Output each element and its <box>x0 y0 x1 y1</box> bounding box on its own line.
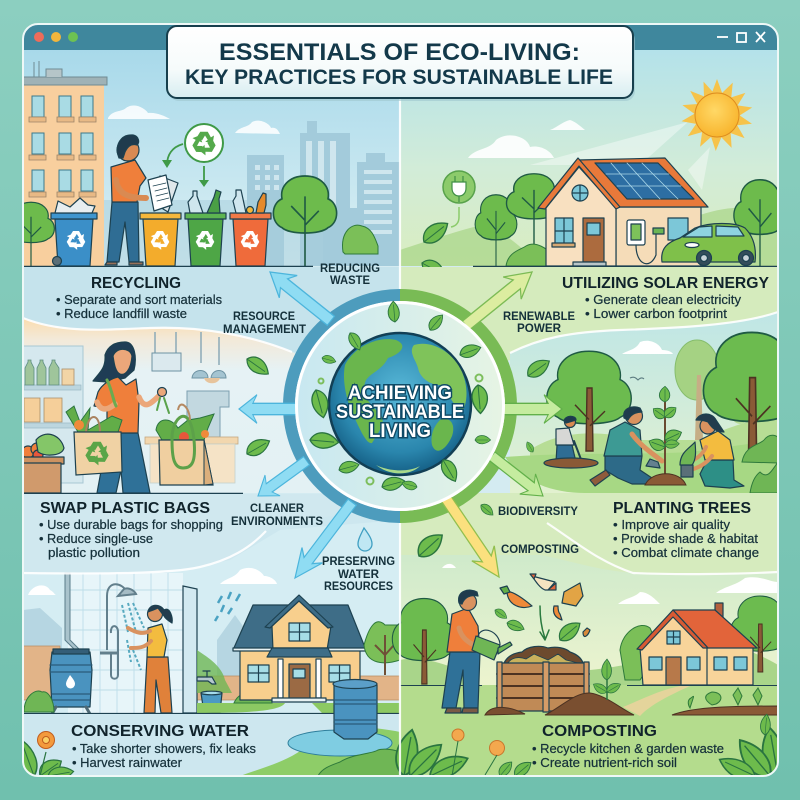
yellow bin <box>140 213 181 266</box>
label: renewable power: RENEWABLE <box>503 311 575 323</box>
garden bed <box>672 688 778 715</box>
caption band <box>400 493 778 600</box>
label: reducing waste: REDUCING <box>320 263 380 275</box>
bullet: durable bags: • Use durable bags for shopping <box>39 518 223 532</box>
tree <box>730 596 790 672</box>
bullet: clean electricity: • Generate clean electricity <box>585 293 742 307</box>
ground <box>400 685 778 776</box>
fence <box>23 646 400 700</box>
icon: recycle on blue bin <box>66 231 86 250</box>
heading: conserving water: CONSERVING WATER <box>71 723 249 740</box>
pale trees <box>675 340 750 440</box>
green bin <box>185 190 226 266</box>
grocery bag with vegetables <box>156 405 214 485</box>
city skyline <box>247 121 400 266</box>
ground line <box>24 266 313 267</box>
person sorting <box>105 135 178 265</box>
flower and foliage <box>12 732 75 782</box>
orange flowers <box>452 729 504 776</box>
panel: composting <box>392 555 790 784</box>
label: resource management: RESOURCE <box>233 311 295 323</box>
compost heaps <box>485 693 634 715</box>
bullet: rainwater: • Harvest rainwater <box>72 756 182 770</box>
icon: recycling badge <box>162 124 223 187</box>
bullet: air quality: • Improve air quality <box>613 518 731 532</box>
label: resource management <box>223 311 306 336</box>
tree <box>547 351 631 451</box>
label: renewable power <box>503 311 575 335</box>
icon: recycle on orange bin <box>240 231 260 250</box>
pond and grass <box>240 728 400 776</box>
arrow: to biodiversity <box>484 446 551 506</box>
rain drops <box>215 592 240 621</box>
tote bag with recycle icon <box>66 406 122 475</box>
solar house <box>538 158 708 266</box>
leaves <box>419 217 452 248</box>
electric car <box>662 224 755 266</box>
arrow: to water <box>285 494 362 586</box>
clouds <box>468 120 585 158</box>
title bar strip <box>23 24 778 50</box>
shelves <box>23 346 83 483</box>
label: composting: COMPOSTING <box>501 544 579 556</box>
tree <box>703 332 800 455</box>
label: renewable power: POWER <box>517 323 562 335</box>
arrow: to composting <box>435 491 510 585</box>
shrub <box>24 691 54 712</box>
label: preserving water resources: PRESERVING <box>322 556 395 568</box>
globe label: ACHIEVING <box>348 382 452 404</box>
shrub <box>742 435 778 463</box>
ground line <box>24 492 243 494</box>
trees <box>475 195 517 266</box>
caption band <box>23 714 400 776</box>
label: preserving water resources: WATER <box>338 569 380 581</box>
falling leaves <box>493 607 509 621</box>
bubbles <box>318 374 482 484</box>
window controls <box>717 32 765 42</box>
rain barrel <box>50 649 92 714</box>
distant houses <box>23 608 260 680</box>
globe label <box>336 382 464 442</box>
grass <box>197 703 400 713</box>
orange bin <box>230 190 271 266</box>
ground line <box>473 266 778 268</box>
bullet: climate: • Combat climate change <box>613 546 759 560</box>
panel: planting trees <box>400 312 800 600</box>
background hills <box>530 410 778 470</box>
ground line <box>23 712 400 714</box>
panel: utilizing solar energy <box>400 50 786 400</box>
clouds <box>108 105 280 134</box>
drainpipe <box>65 573 80 650</box>
hanging sign and utensils <box>152 332 226 383</box>
hills <box>400 208 778 266</box>
title line 1: ESSENTIALS OF ECO-LIVING: <box>219 39 580 66</box>
heading: planting trees: PLANTING TREES <box>613 500 751 517</box>
title line 2: KEY PRACTICES FOR SUSTAINABLE LIFE <box>185 66 613 89</box>
window dots <box>34 32 78 42</box>
tree behind house <box>620 625 660 680</box>
clouds <box>28 568 277 595</box>
label: resource management: MANAGEMENT <box>223 324 306 336</box>
small sprout <box>524 440 535 454</box>
icon: recycle on green bin <box>196 231 214 250</box>
floating leaves <box>243 353 553 562</box>
label: biodiversity: BIODIVERSITY <box>498 506 578 518</box>
kneeling woman <box>680 414 744 488</box>
bullets: recycling: • Separate and sort materials <box>56 293 222 307</box>
hills <box>400 640 778 700</box>
falling food scraps <box>500 574 590 640</box>
globe label line 2: SUSTAINABLE <box>336 401 464 423</box>
heading: recycling: RECYCLING <box>91 275 181 292</box>
label: preserving water resources: RESOURCES <box>324 581 393 593</box>
title box <box>167 26 635 101</box>
arrow: to bags <box>239 395 299 423</box>
bullet: carbon footprint: • Lower carbon footprint <box>585 307 728 321</box>
arrow: to trees <box>502 395 562 423</box>
bullet: soil: • Create nutrient-rich soil <box>532 756 677 770</box>
seedling <box>591 659 622 700</box>
bird <box>630 377 644 380</box>
caption band <box>24 494 243 495</box>
cash register and counter <box>145 391 238 483</box>
shower <box>100 584 144 679</box>
tree <box>273 176 337 266</box>
house <box>637 603 757 685</box>
bullet: pollution: plastic pollution <box>48 546 140 560</box>
label: cleaner environments: ENVIRONMENTS <box>231 516 323 528</box>
path <box>623 686 690 716</box>
bullet: shade: • Provide shade & habitat <box>613 532 759 546</box>
compost bin <box>497 646 589 712</box>
gardener with watering can <box>442 590 512 713</box>
woman with shopping bags <box>93 342 169 493</box>
label: reducing waste <box>320 263 380 287</box>
globe <box>329 333 471 475</box>
heading: solar energy: UTILIZING SOLAR ENERGY <box>562 275 770 292</box>
foreground foliage <box>750 462 778 493</box>
icon: recycle on yellow bin <box>150 231 170 250</box>
white panel dividers <box>23 98 778 776</box>
bullet: landfill: • Reduce landfill waste <box>56 307 187 321</box>
caption band <box>400 267 778 400</box>
label: reducing waste: WASTE <box>330 275 370 287</box>
shrub <box>234 694 272 703</box>
shower tile wall <box>68 573 232 713</box>
sun rays <box>530 122 710 190</box>
house <box>233 595 366 702</box>
arrow: to solar <box>457 261 541 337</box>
ground lines <box>400 684 778 686</box>
heading: swap plastic bags: SWAP PLASTIC BAGS <box>40 500 210 517</box>
lawn <box>505 440 778 493</box>
icon: water drop <box>358 528 372 551</box>
foreground foliage <box>393 714 787 784</box>
faucet and bucket <box>197 671 222 713</box>
water tank <box>333 680 377 739</box>
blue bin <box>51 198 97 266</box>
arrow: to cleaner environments <box>251 450 314 506</box>
bullet: showers: • Take shorter showers, fix leaks <box>72 742 256 756</box>
globe label line 3: LIVING <box>369 420 431 442</box>
shrub <box>506 244 560 266</box>
woman showering <box>128 605 172 713</box>
icon: green plug badge <box>443 171 475 227</box>
icon: sun <box>680 79 754 151</box>
small tree <box>24 202 55 266</box>
heading: composting: COMPOSTING <box>542 723 657 740</box>
tree <box>364 622 400 675</box>
bullet: single-use: • Reduce single-use <box>39 532 153 546</box>
sapling <box>645 386 686 485</box>
produce crate <box>22 434 64 493</box>
tree <box>392 598 456 684</box>
orbiting leaves <box>346 330 365 352</box>
label: cleaner environments: CLEANER <box>250 503 305 515</box>
central badge ring <box>284 290 516 522</box>
arrow: to recycling <box>261 261 340 332</box>
shrub <box>343 225 378 254</box>
panel: conserving water <box>24 568 400 775</box>
panel: recycling <box>8 50 400 360</box>
bullet: recycle waste: • Recycle kitchen & garden waste <box>532 742 724 756</box>
central badge disk <box>295 301 505 511</box>
clouds <box>442 564 778 604</box>
apartment building <box>23 61 107 266</box>
cloud <box>622 341 673 354</box>
panel: swap plastic bags <box>24 320 322 560</box>
small gardener <box>544 416 598 468</box>
caption band <box>23 267 400 360</box>
label: cleaner environments <box>231 503 323 528</box>
kneeling man <box>590 407 662 486</box>
label: preserving water resources <box>322 556 395 593</box>
